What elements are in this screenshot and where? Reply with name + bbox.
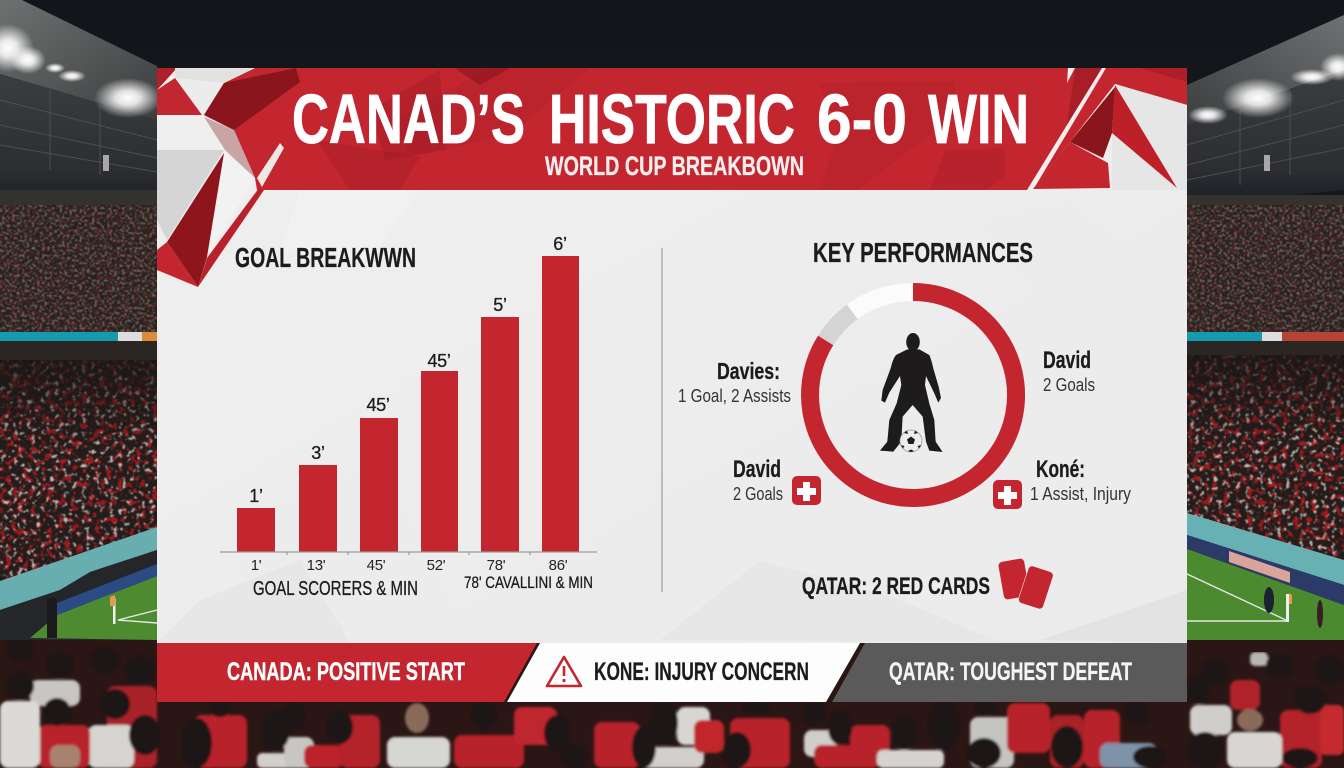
fans below panel: [182, 699, 1167, 768]
axis caption: cavallini: 78' CAVALLINI & MIN: [464, 573, 593, 592]
label: david right: 2 Goals: [1043, 374, 1095, 395]
bar chart: 78': [487, 557, 506, 574]
title: 6-0: [817, 80, 907, 158]
title: [292, 80, 1029, 158]
bottom strip: [157, 643, 1187, 702]
title: CANAD’S: [292, 80, 525, 158]
left polygon decoration: [157, 68, 284, 287]
panel: goal breakdown: [220, 234, 597, 600]
icon: warning triangle: [547, 657, 581, 686]
panel: key performances: [678, 237, 1132, 610]
status: kone: KONE: INJURY CONCERN: [594, 658, 809, 686]
heading: goal breakdown: GOAL BREAKWWN: [235, 242, 416, 273]
label: davies: [678, 358, 791, 406]
bar chart: 6’: [553, 234, 567, 254]
label: david right: [1043, 347, 1095, 395]
label: kone: 1 Assist, Injury: [1030, 483, 1132, 504]
bar chart: 45’: [427, 351, 451, 371]
label: kone: Koné:: [1036, 456, 1085, 483]
status: qatar: QATAR: TOUGHEST DEFEAT: [889, 658, 1132, 686]
label: kone: [1030, 456, 1132, 504]
label: davies: 1 Goal, 2 Assists: [678, 385, 791, 406]
title: HISTORIC: [549, 80, 795, 158]
subtitle: WORLD CUP BREAKBOWN: [545, 151, 804, 181]
label: qatar red cards: QATAR: 2 RED CARDS: [802, 573, 990, 600]
bar chart: [220, 234, 597, 574]
icon: medical cross left: [792, 476, 821, 505]
fans right of panel: [1186, 652, 1344, 768]
icon: player silhouette with ball: [880, 333, 943, 452]
icon: medical cross right: [993, 480, 1022, 509]
status: kone: [507, 643, 860, 702]
upper stand crowd: [0, 190, 1344, 333]
status: qatar: [832, 643, 1187, 702]
pitch-side boards and grass right: [1187, 513, 1344, 642]
bar chart: 13': [307, 557, 326, 574]
donut ring: [810, 292, 1016, 498]
label: david right: David: [1043, 347, 1091, 374]
lower stand crowd: [0, 355, 1344, 582]
right roof with floodlights: [1187, 15, 1344, 205]
main panel: [157, 68, 1187, 643]
title: WIN: [928, 80, 1029, 158]
status: canada: CANADA: POSITIVE START: [227, 658, 465, 686]
status: canada: [157, 643, 537, 702]
axis caption: goal scorers: GOAL SCORERS & MIN: [253, 578, 418, 600]
heading: key performances: KEY PERFORMANCES: [813, 237, 1033, 268]
bar chart: 45': [367, 557, 386, 574]
bar chart: 52': [427, 557, 446, 574]
bar chart: 1’: [249, 486, 263, 506]
bar chart: 45’: [366, 395, 390, 415]
divider: [662, 248, 663, 592]
label: david left: [733, 456, 783, 504]
bar chart: 3’: [311, 443, 325, 463]
label: david left: David: [733, 456, 781, 483]
icon: red cards: [998, 558, 1054, 610]
left roof with floodlights: [0, 0, 162, 205]
stadium ad ribbon: [0, 332, 1344, 361]
header banner: [157, 68, 1187, 287]
label: david left: 2 Goals: [733, 483, 783, 504]
pitch-side boards and grass left: [0, 527, 157, 642]
right polygon decoration: [1027, 68, 1187, 190]
fans left of panel: [0, 640, 161, 768]
bar chart: 86': [549, 557, 568, 574]
label: davies: Davies:: [717, 358, 780, 384]
bar chart: 5’: [493, 295, 507, 315]
bar chart: 1': [251, 557, 262, 574]
fans in foreground: [0, 640, 1344, 768]
